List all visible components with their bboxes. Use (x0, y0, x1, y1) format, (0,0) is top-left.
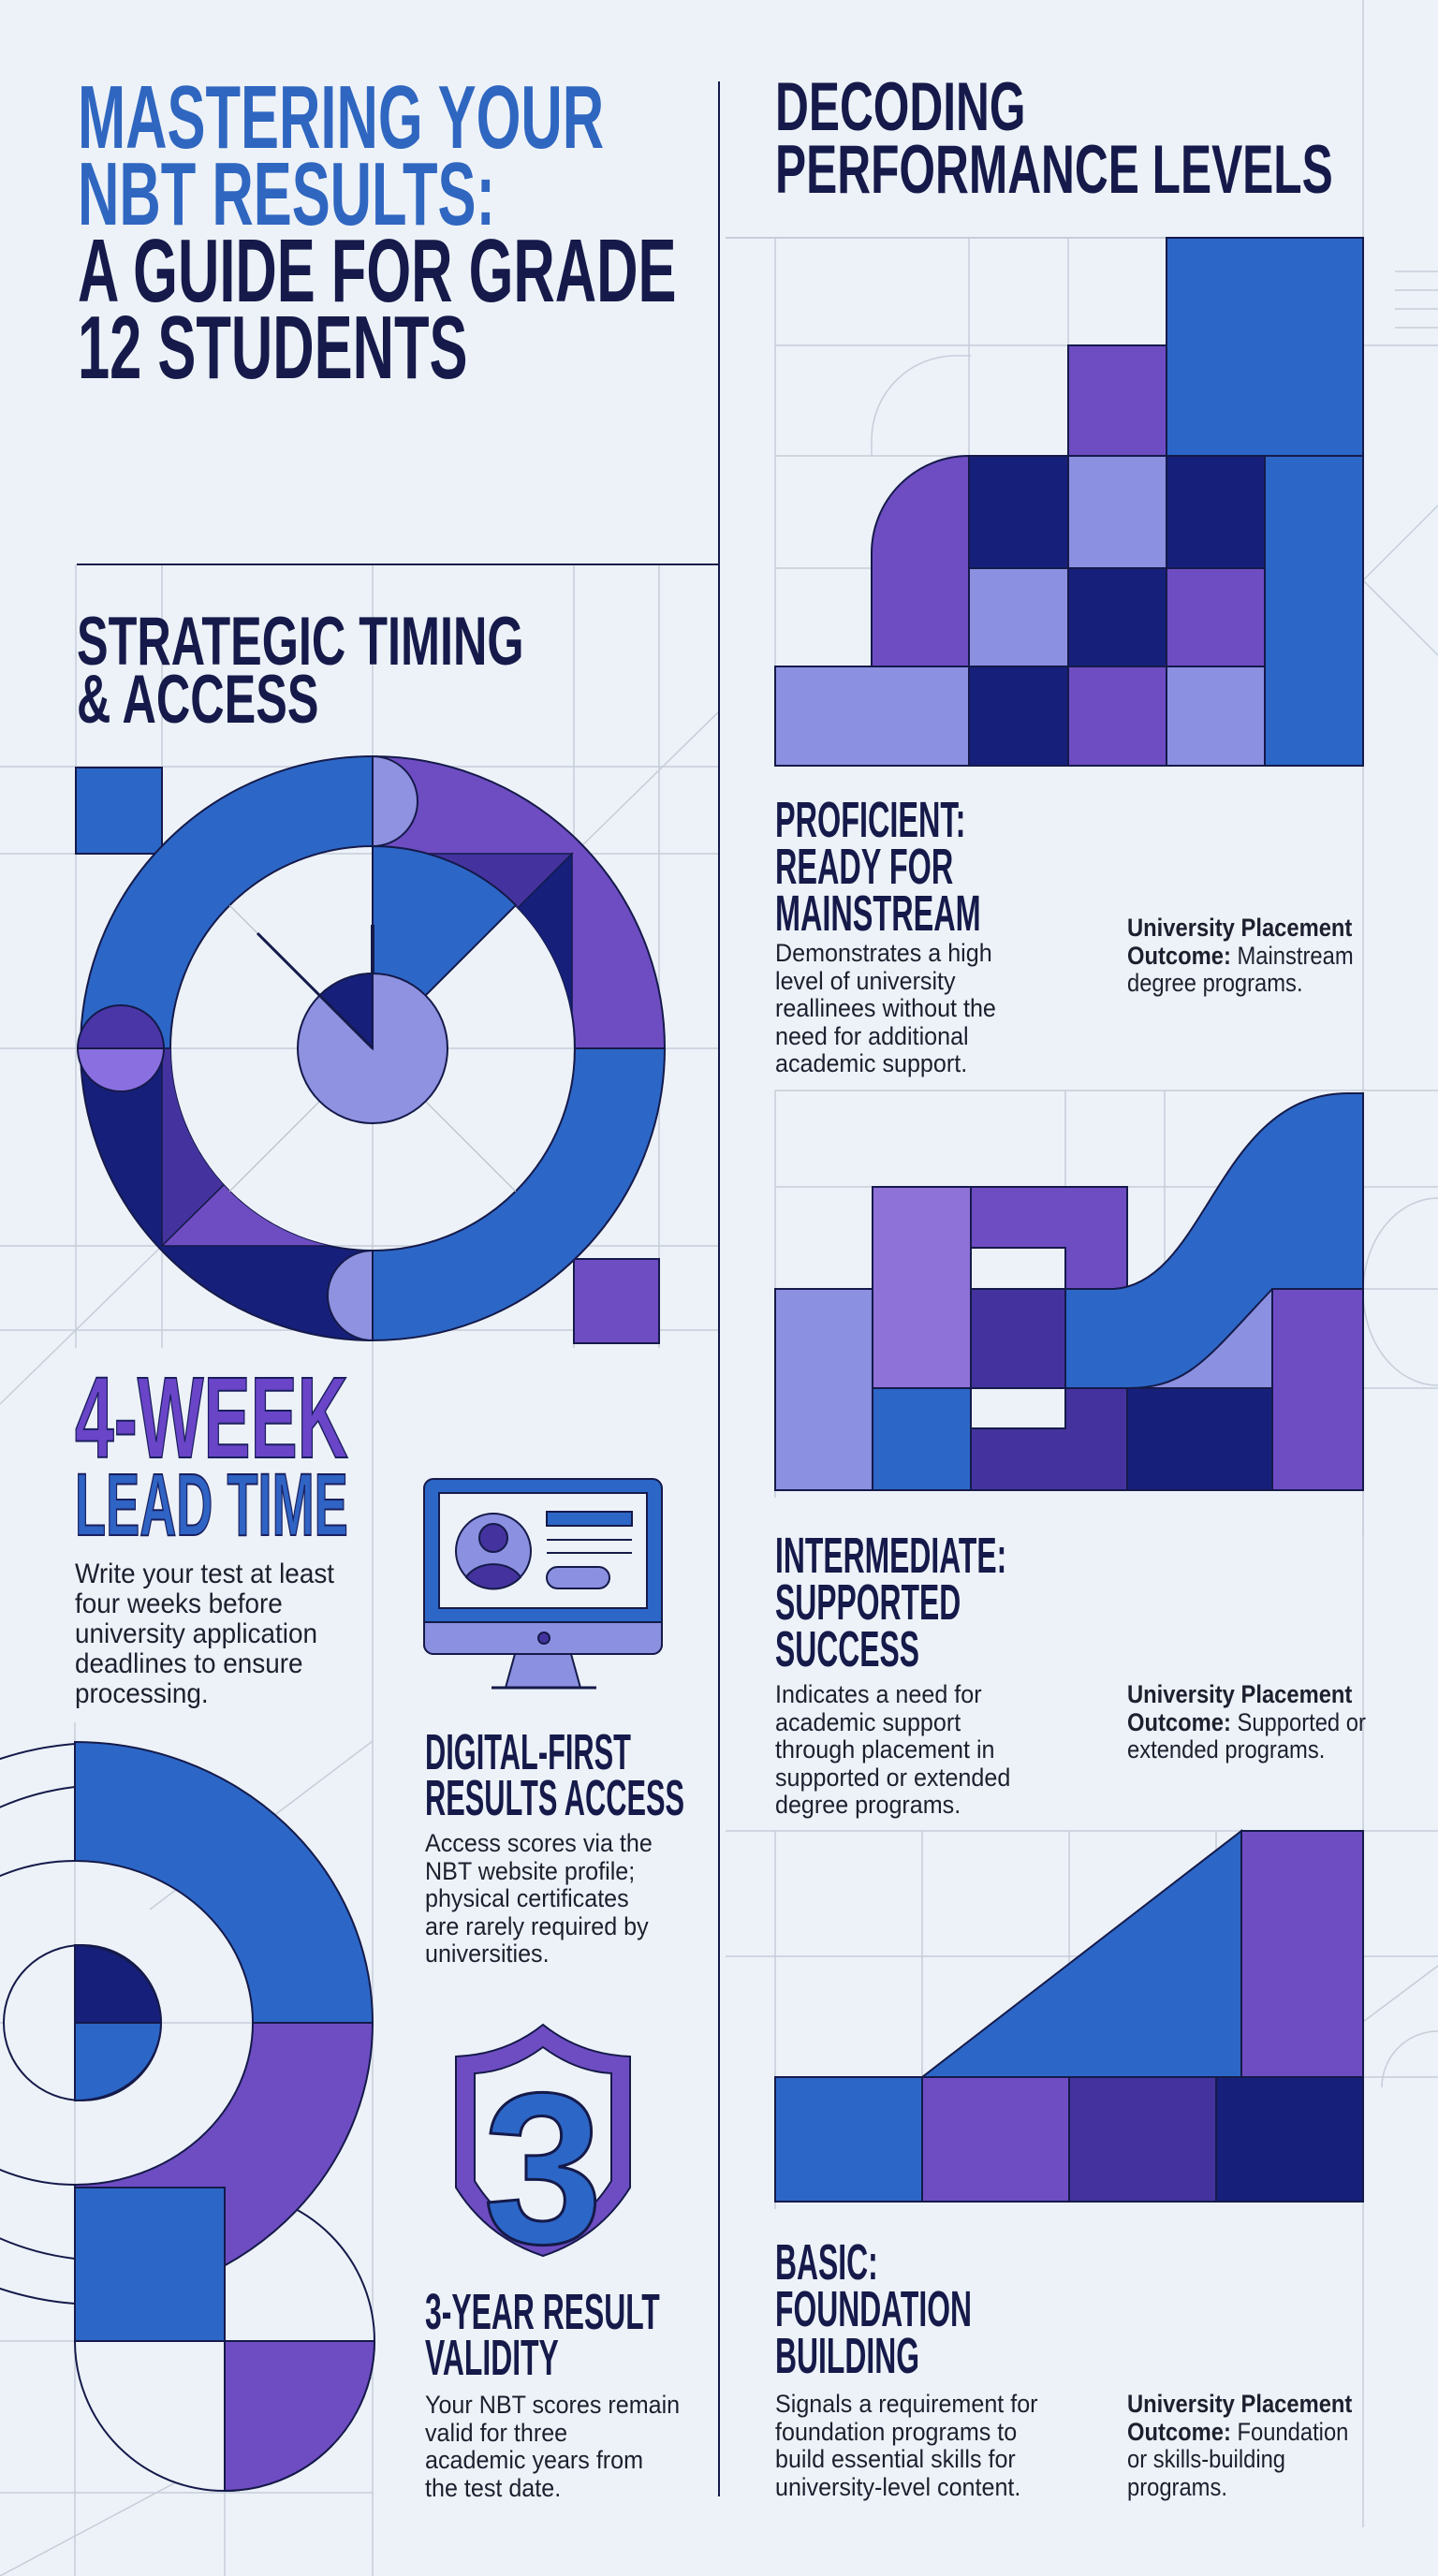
heading: proficient: READY FOR (775, 839, 953, 895)
text: intermediate (775, 1680, 1010, 1819)
text: intermediate placement (1127, 1680, 1366, 1764)
text: basic placement: programs. (1127, 2473, 1227, 2501)
heading: basic: FOUNDATION (775, 2281, 972, 2337)
heading: digital-first (425, 1724, 684, 1826)
heading: intermediate: INTERMEDIATE: (775, 1528, 1006, 1584)
text: proficient placement (1127, 914, 1354, 997)
heading: 4-week: 4-WEEK (75, 1354, 348, 1483)
title: A GUIDE FOR GRADE (78, 221, 676, 321)
heading: basic: BUILDING (775, 2328, 919, 2384)
heading: basic: BASIC: (775, 2234, 878, 2291)
text: digital-first: NBT website profile; (425, 1857, 635, 1885)
text: lead time (75, 1559, 334, 1709)
text: proficient placement: Outcome: Mainstream (1127, 942, 1354, 970)
text: intermediate: academic support (775, 1707, 961, 1735)
chart: intermediate blocks (775, 1093, 1363, 1490)
title: NBT RESULTS: (78, 144, 495, 244)
text: intermediate: degree programs. (775, 1791, 961, 1819)
text: basic placement: or skills-building (1127, 2445, 1285, 2473)
chart: basic blocks (775, 1831, 1363, 2202)
text: basic (775, 2390, 1038, 2501)
text: 3-year (425, 2391, 680, 2501)
text: proficient (775, 939, 996, 1077)
text: basic: foundation programs to (775, 2417, 1017, 2445)
heading: proficient: PROFICIENT: (775, 792, 965, 848)
text: digital-first: universities. (425, 1939, 550, 1968)
text: intermediate: supported or extended (775, 1764, 1010, 1792)
title: MASTERING YOUR (78, 67, 604, 168)
text: proficient: level of university (775, 966, 956, 994)
heading: intermediate: SUCCESS (775, 1621, 919, 1677)
text: lead time: Write your test at least (75, 1559, 334, 1589)
heading: decoding performance levels: DECODING (775, 69, 1026, 145)
text: proficient: need for additional (775, 1022, 969, 1050)
text: intermediate placement: Outcome: Supported or (1127, 1707, 1366, 1735)
heading: 3-year: 3-YEAR RESULT (425, 2284, 660, 2340)
icon: shield 3 (456, 2025, 630, 2289)
text: basic: university-level content. (775, 2473, 1020, 2501)
heading: digital-first: DIGITAL-FIRST (425, 1724, 631, 1780)
heading: decoding performance levels: PERFORMANCE LEVELS (775, 132, 1333, 208)
heading: intermediate: SUPPORTED (775, 1574, 961, 1631)
text: lead time: processing. (75, 1678, 209, 1709)
heading: strategic timing (77, 604, 524, 738)
text: 3-year: the test date. (425, 2473, 561, 2501)
text: lead time: university application (75, 1618, 317, 1649)
text: proficient: Demonstrates a high (775, 939, 992, 967)
heading: 3-year (425, 2284, 660, 2386)
text: basic: build essential skills for (775, 2445, 1016, 2473)
heading: proficient: MAINSTREAM (775, 886, 981, 942)
text: digital-first: Access scores via the (425, 1829, 653, 1857)
title (78, 67, 676, 398)
text: 3-year: Your NBT scores remain (425, 2391, 680, 2419)
text: lead time: deadlines to ensure (75, 1648, 303, 1679)
text: basic: Signals a requirement for (775, 2390, 1038, 2418)
text: proficient placement: University Placement (1127, 914, 1352, 942)
heading: intermediate (775, 1528, 1006, 1677)
text: basic placement (1127, 2390, 1352, 2501)
text: intermediate: through placement in (775, 1735, 995, 1764)
icon: shield 3: 3 (483, 2048, 603, 2289)
heading: decoding performance levels (775, 69, 1333, 208)
text: 3-year: valid for three (425, 2419, 567, 2447)
heading: strategic timing: & ACCESS (77, 662, 318, 738)
text: digital-first (425, 1829, 653, 1968)
text: proficient: reallinees without the (775, 994, 996, 1022)
heading: lead time: LEAD TIME (75, 1456, 348, 1555)
text: lead time: four weeks before (75, 1588, 283, 1619)
text: digital-first: physical certificates (425, 1884, 629, 1912)
text: proficient: academic support. (775, 1049, 967, 1077)
heading: strategic timing: STRATEGIC TIMING (77, 604, 524, 680)
text: proficient placement: degree programs. (1127, 969, 1303, 997)
chart: proficient blocks (775, 238, 1363, 766)
text: basic placement: Outcome: Foundation (1127, 2417, 1348, 2445)
text: digital-first: are rarely required by (425, 1911, 649, 1939)
text: basic placement: University Placement (1127, 2390, 1352, 2418)
text: intermediate placement: University Placement (1127, 1680, 1352, 1708)
clock graphic (76, 756, 665, 1343)
heading: 3-year: VALIDITY (425, 2330, 559, 2386)
title: 12 STUDENTS (78, 298, 468, 398)
text: 3-year: academic years from (425, 2446, 643, 2474)
text: intermediate placement: extended programs. (1127, 1735, 1325, 1764)
concentric graphic bottom-left (0, 1742, 374, 2491)
icon: monitor (424, 1479, 662, 1688)
heading: basic (775, 2234, 972, 2384)
text: intermediate: Indicates a need for (775, 1680, 982, 1708)
heading: digital-first: RESULTS ACCESS (425, 1770, 684, 1826)
heading: proficient (775, 792, 981, 942)
